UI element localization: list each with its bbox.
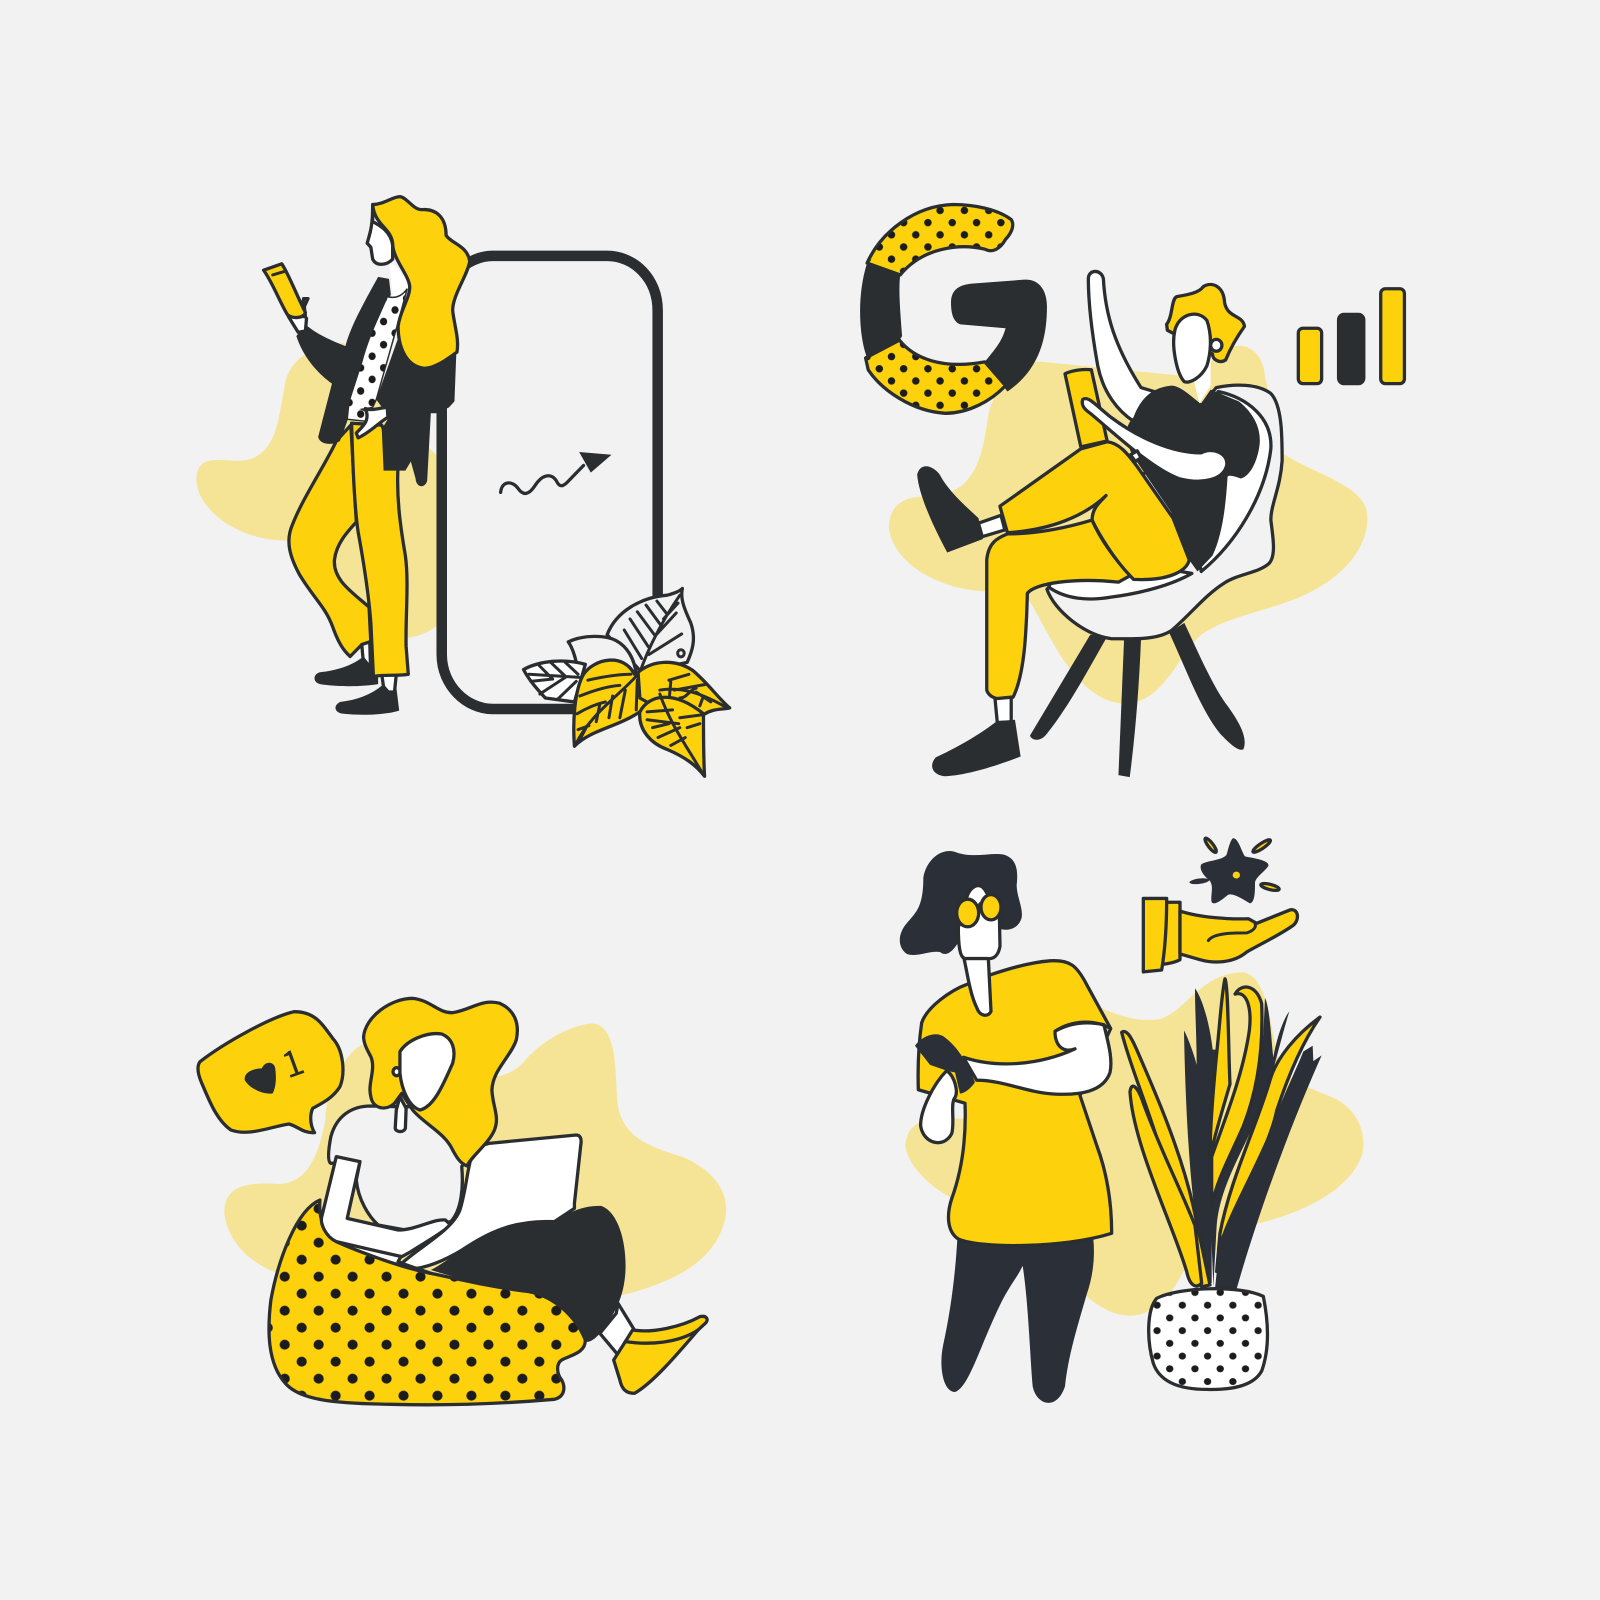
leaf: yellow bottom bbox=[640, 694, 705, 776]
holding hand bbox=[288, 299, 308, 332]
dark cuff bbox=[915, 1034, 975, 1094]
G dark crossbar bbox=[951, 280, 1047, 392]
neck bbox=[395, 1097, 406, 1132]
arm bbox=[321, 1157, 451, 1257]
crossed arm bbox=[963, 1023, 1111, 1094]
dark trousers bbox=[941, 1239, 1094, 1403]
leaf: yellow left bbox=[574, 660, 663, 746]
upper trouser leg bbox=[1000, 442, 1189, 580]
G bottom dotted arc bbox=[866, 340, 1006, 413]
G dark left stroke bbox=[860, 263, 902, 356]
panel: woman leaning on phone frame bbox=[196, 197, 730, 776]
signal bars bbox=[1298, 289, 1404, 384]
leaf: yellow right bbox=[638, 662, 730, 715]
icon: heart bbox=[245, 1063, 276, 1094]
arrow: growth squiggle bbox=[501, 452, 611, 493]
hair bbox=[364, 998, 517, 1166]
lower trouser leg bbox=[987, 520, 1130, 699]
face bbox=[400, 1034, 454, 1110]
speech bubble bbox=[198, 1012, 343, 1133]
jacket back panel bbox=[376, 338, 456, 486]
pale yellow blob bbox=[905, 972, 1364, 1316]
long wavy hair bbox=[373, 197, 470, 368]
back ankle bbox=[362, 642, 370, 666]
front leg bbox=[352, 423, 408, 676]
yellow blade right bbox=[1217, 1017, 1320, 1272]
back leg bbox=[289, 425, 371, 656]
yellow curled blade bbox=[1212, 987, 1262, 1206]
raised shoe bbox=[917, 466, 983, 552]
face bbox=[1174, 314, 1210, 382]
front arm bbox=[1082, 399, 1227, 481]
lower shoe bbox=[932, 720, 1021, 776]
lower sock bbox=[995, 697, 1011, 723]
neck bbox=[964, 959, 991, 1015]
hair bbox=[1167, 285, 1245, 362]
yellow blade left bbox=[1122, 1032, 1210, 1287]
panel: man in chair with G letter bbox=[860, 205, 1404, 777]
polka dot blouse bbox=[347, 289, 407, 421]
icon: star bbox=[1189, 837, 1280, 903]
chair legs bbox=[1030, 623, 1245, 777]
leaf: left white bbox=[524, 661, 585, 702]
front shoe bbox=[335, 684, 399, 715]
yellow shirt bbox=[918, 961, 1112, 1246]
back shoe bbox=[315, 656, 378, 686]
plant bbox=[1122, 979, 1322, 1289]
front ankle bbox=[382, 674, 396, 692]
lower white strip bbox=[336, 1242, 431, 1273]
yellow blade middle bbox=[1210, 979, 1230, 1157]
panel: woman on beanbag with laptop bbox=[198, 998, 726, 1405]
chair inner back bbox=[1197, 392, 1271, 571]
dark skirt bbox=[431, 1206, 626, 1342]
small strap bbox=[1130, 451, 1141, 462]
hand on hip bbox=[356, 407, 388, 438]
like count number: 1 bbox=[274, 1033, 310, 1089]
G top dotted arc bbox=[867, 205, 1013, 275]
hanging hand bbox=[921, 1071, 956, 1143]
laptop bbox=[402, 1135, 581, 1268]
torso bbox=[329, 1106, 471, 1230]
chair shell bbox=[1047, 385, 1282, 639]
pale yellow blob bbox=[889, 346, 1367, 704]
dark blade back bbox=[1184, 988, 1218, 1283]
dark blade outer bbox=[1215, 1046, 1322, 1289]
face bbox=[958, 886, 1000, 959]
raised arm bbox=[1088, 271, 1154, 421]
chair seat bbox=[1049, 564, 1192, 599]
polka dot pot bbox=[1149, 1289, 1267, 1389]
round glasses bbox=[957, 895, 1001, 927]
ear bbox=[393, 1068, 400, 1076]
letter G bbox=[860, 205, 1047, 413]
dark t-shirt torso bbox=[1126, 386, 1260, 571]
smartphone bbox=[264, 264, 305, 318]
leaf: top white bbox=[607, 588, 693, 672]
sleeve edge bbox=[1055, 1022, 1111, 1031]
back slipper bbox=[625, 1316, 707, 1344]
face bbox=[367, 206, 393, 264]
ear bbox=[1211, 339, 1222, 351]
leaf: back white bbox=[568, 636, 636, 678]
phone earpiece bbox=[273, 272, 284, 275]
polka dot beanbag bbox=[269, 1200, 585, 1405]
icon: open hand bbox=[1143, 898, 1297, 972]
dark blade right bbox=[1210, 998, 1289, 1287]
pale yellow blob bbox=[196, 343, 438, 638]
panel: person with glasses and plant bbox=[900, 837, 1364, 1403]
smartphone bbox=[1065, 370, 1107, 447]
phone frame outline bbox=[442, 256, 658, 709]
yellow blade lower left bbox=[1130, 1086, 1202, 1286]
jacket front and sleeve bbox=[296, 277, 391, 444]
socks bbox=[600, 1303, 634, 1355]
neck bbox=[389, 261, 409, 297]
neck bbox=[1194, 354, 1211, 403]
pale yellow blob bbox=[224, 1023, 726, 1295]
dark hair bbox=[900, 851, 1022, 955]
front slipper bbox=[614, 1330, 698, 1393]
raised leg sock bbox=[978, 515, 1005, 537]
